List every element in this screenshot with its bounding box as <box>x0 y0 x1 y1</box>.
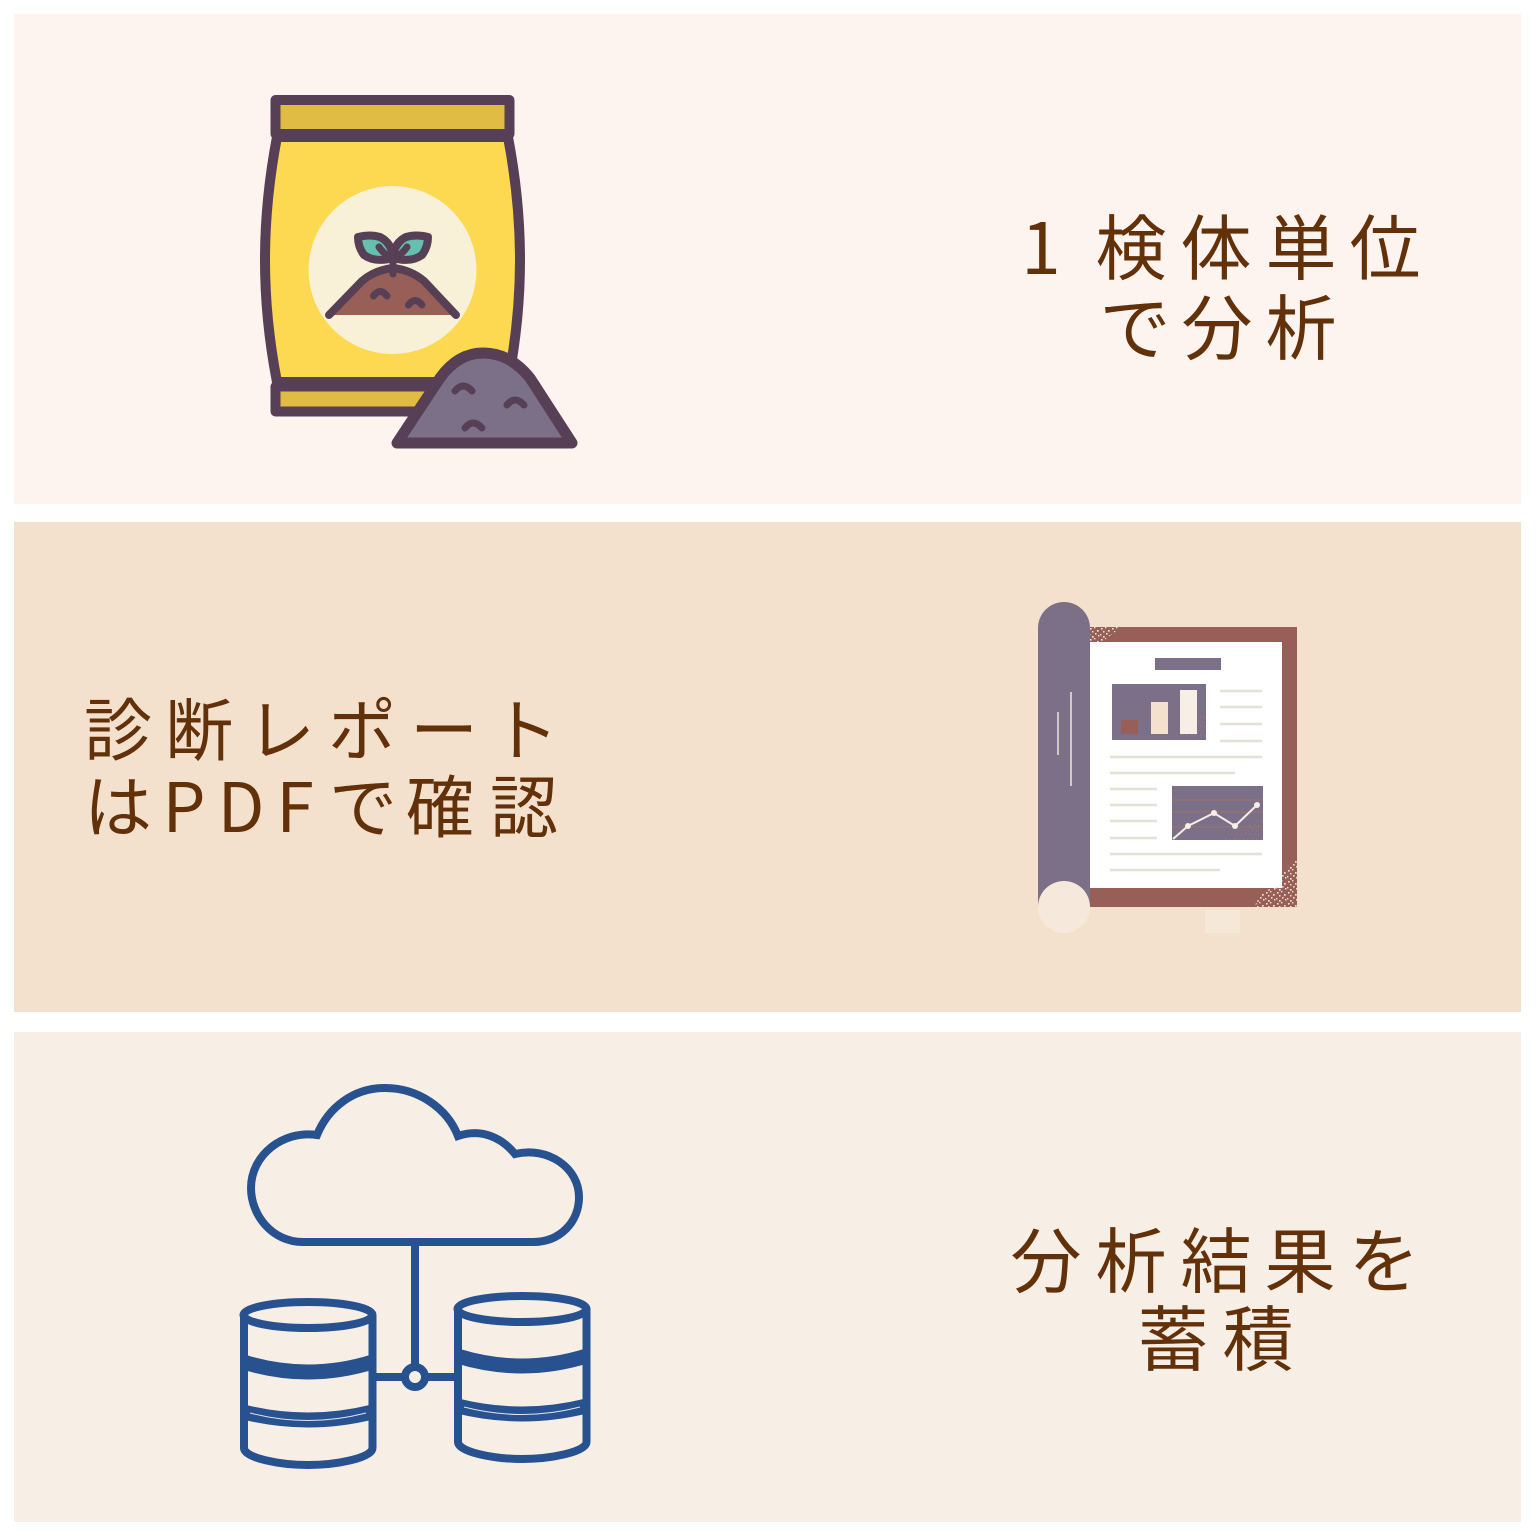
text: per-sample analysis: 1 検体単位 <box>1021 193 1421 295</box>
text: stored results: 分析結果を <box>1010 1206 1420 1308</box>
text: per-sample analysis: で分析 <box>1099 273 1337 375</box>
panel: stored results <box>14 1032 1521 1522</box>
icon: report document <box>1038 602 1297 933</box>
text: stored results: 蓄積 <box>1137 1284 1294 1386</box>
text: per-sample analysis <box>1021 193 1421 375</box>
panel: per-sample analysis <box>14 14 1521 504</box>
icon: cloud linked to databases <box>244 1088 586 1465</box>
text: stored results <box>1010 1206 1420 1386</box>
panel: PDF report <box>14 522 1521 1012</box>
text: PDF report <box>84 676 559 852</box>
icon: fertilizer bag with soil pile <box>265 100 572 443</box>
text: PDF report: 診断レポート <box>84 676 559 775</box>
text: PDF report: はPDFで確認 <box>84 753 558 852</box>
